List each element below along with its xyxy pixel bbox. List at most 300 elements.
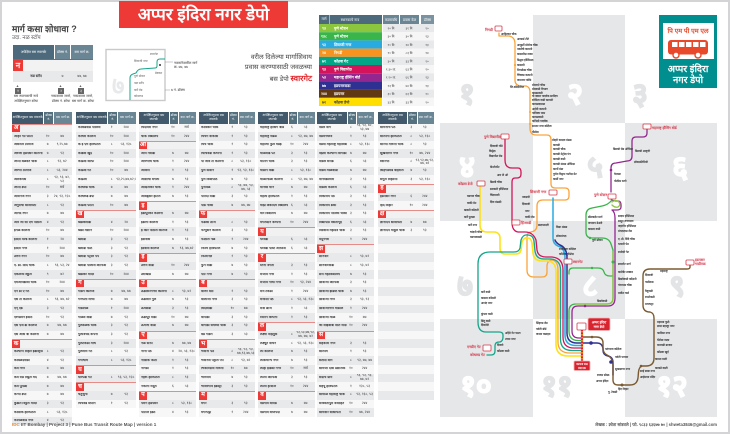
route colour key table: १.३० ता. — [386, 68, 396, 72]
index table column 2: १० — [110, 228, 114, 232]
index table column 4 — [199, 112, 255, 414]
index table column 1: ८ — [47, 203, 49, 207]
index table column 6: १० — [349, 366, 353, 370]
terminal stations — [477, 26, 694, 351]
index table column 6: ९३ — [363, 134, 366, 138]
route colour key table: ३१ मि — [406, 26, 413, 30]
index table column 3: ७ — [172, 237, 174, 241]
index table column 6: ७७ — [363, 151, 366, 155]
index table column 6: अपेक्षितनुसार बस स्थानके — [321, 113, 342, 121]
index table column 6: ९३ — [363, 289, 366, 293]
how-to example table: नकाशावर जाणे, बस मार्ग क्र. शोधा — [72, 94, 94, 103]
index table column 1: ७७ — [60, 228, 64, 232]
map grid: 12 numbered sectors — [440, 15, 717, 417]
index table column 3: ६ — [172, 384, 174, 388]
example mini map: कोथरूड — [134, 94, 143, 98]
station labels: येरवडा — [613, 172, 621, 176]
index table column 4: ८ — [231, 358, 233, 362]
index table column 3: २४४ — [184, 159, 189, 163]
index table column 4: ९३ — [244, 254, 248, 258]
index table column 2: ३ — [111, 263, 113, 267]
index table column 2: १० — [110, 168, 114, 172]
index table column 1: ८ — [47, 168, 49, 172]
index table column 4: ९३ — [244, 142, 248, 146]
index table column 1: १० — [46, 228, 50, 232]
badge: PMPML depot — [659, 15, 717, 88]
index table column 5: डॉक्स नं. — [290, 113, 296, 121]
index table column 4: डॉक्स नं. — [230, 113, 237, 121]
Swargate note: प्रवास करण्यासाठी जवळच्या — [245, 64, 312, 71]
station labels: कर्मवीर ठक्कर — [617, 270, 634, 274]
route colour key table: १० मि — [388, 26, 395, 30]
index table column 2: १० — [110, 151, 114, 155]
index table column 4: ५३, १३८ — [240, 159, 251, 163]
index table column 5: १० — [290, 220, 294, 224]
index table column 2: बस मार्ग क्र. — [120, 115, 134, 119]
station labels: काकडे वस्ती — [654, 366, 668, 370]
index table column 5: ९३, ५३, १३८ — [297, 297, 314, 301]
index table column 4: ९३ — [244, 246, 248, 250]
index table column 2: १ — [111, 401, 113, 405]
index table column 6: ८ — [350, 254, 352, 258]
index table column 7: ७७ — [423, 220, 427, 224]
station labels: सिंहगड रोड — [535, 321, 548, 325]
index table column 5: ६ — [291, 203, 293, 207]
route colour key table: स्थानकाचे नाव — [341, 17, 360, 22]
index table column 3: १० — [171, 125, 175, 129]
index table column 2: ३ — [111, 332, 113, 336]
station labels: मगरपट्टा — [644, 302, 654, 306]
index table column 5: ५३ — [304, 125, 307, 129]
station labels: सान्तर नगर कॉलेज — [531, 124, 552, 128]
station labels: निगडोळा चौक — [516, 68, 533, 72]
index table column 2: ९३ — [124, 246, 128, 250]
index table column 5: ६ — [291, 246, 293, 250]
station labels: चिंचवड कम्पनी — [516, 73, 533, 77]
index table column 1: ७ — [47, 142, 49, 146]
index table column 6: ८ — [350, 358, 352, 362]
index table column 5: ७७ — [304, 401, 307, 405]
station labels: कासारी — [516, 63, 525, 67]
route colour key table: ३० मि — [388, 59, 395, 63]
index table column 2: ९३ — [124, 349, 128, 353]
route colour key table: ६३ मि — [406, 92, 413, 96]
index table column 4: ७ — [231, 177, 233, 181]
index table column 6: ८ — [350, 142, 352, 146]
index table column 6: १० — [349, 410, 353, 414]
index table column 3: १० — [171, 134, 175, 138]
station labels: चांदनी चौक — [469, 230, 483, 234]
index table column 2: १० — [110, 203, 114, 207]
index table column 4: ७ — [231, 203, 233, 207]
station labels: कासारीस नाका — [516, 52, 533, 56]
index table column 4: ७ — [231, 272, 233, 276]
index table column 5: य — [260, 229, 264, 235]
station labels: पर्वती पायथा — [614, 355, 628, 359]
index table column 6: ९३ — [363, 228, 366, 232]
index table column 4: ९३ — [244, 228, 248, 232]
index table column 6: १ — [350, 134, 352, 138]
index table column 5: २४४ — [303, 289, 308, 293]
map grid: 12 numbered sectors: ८ — [582, 270, 598, 303]
index table column 5: ३ — [291, 159, 293, 163]
station labels: विद्यापीठ रोड — [488, 154, 503, 158]
route colour key table: १४ — [425, 51, 429, 55]
index table column 4: ९३, ९३, १३८ — [237, 168, 254, 172]
index table column 2: ८ — [111, 358, 113, 362]
index table column 1: ७७, ७७ — [57, 323, 67, 327]
route colour key table: १.१० ता. — [386, 76, 396, 80]
index table column 4: ९३ — [244, 134, 248, 138]
index table column 1: ९३ — [60, 315, 64, 319]
index table column 1: ३ — [47, 306, 49, 310]
index table column 3: ४ — [172, 349, 174, 353]
station labels: कोंढवा खुर्द — [656, 350, 670, 354]
index table column 4: ७७, ७७ — [241, 203, 250, 207]
route rows: १३८ — [321, 35, 327, 39]
index table column 6: ३ — [350, 177, 352, 181]
index table column 1: ७७ — [60, 134, 64, 138]
index table column 2: ३ — [111, 237, 113, 241]
index table column 3: ९३, ७२ — [182, 289, 191, 293]
index table column 2: ८ — [111, 142, 113, 146]
index table column 6: १० — [349, 323, 353, 327]
route: Kondhwa gate teal — [478, 235, 582, 355]
index table column 6: २४४ — [362, 306, 367, 310]
index table column 4: २४४ — [243, 410, 248, 414]
how-to example table: ▲ — [16, 84, 19, 88]
how-to example table: ७ — [62, 74, 63, 78]
index table column 2: ७ — [111, 289, 113, 293]
index table column 2: ७७ — [124, 194, 128, 198]
route rows: ९३ — [322, 26, 326, 30]
route colour key table: १३ — [425, 43, 429, 47]
index table column 6: ३ — [350, 194, 352, 198]
station labels: नगर — [524, 209, 530, 213]
station labels: महात्मा फुले — [656, 320, 670, 324]
index table column 3: १ — [172, 220, 174, 224]
index table column 1: ७७ — [60, 332, 64, 336]
station labels: जमनगर कोके — [516, 78, 532, 82]
station labels: शिवाजी — [644, 273, 653, 277]
index table column 6: ३ — [350, 297, 352, 301]
index table column 6: ७७ — [363, 168, 366, 172]
index table column 3: ८ — [172, 375, 174, 379]
index table column 2: ७७, ७७ — [121, 289, 131, 293]
index table column 2: ३ — [111, 323, 113, 327]
station labels: फातिमा नगर — [656, 331, 671, 335]
index table column 4: १ — [231, 125, 233, 129]
index table column 2: १० — [110, 272, 114, 276]
how-to example table: नकाशावर जाणे, डॉक्स नं. शोधा — [51, 94, 71, 103]
index table column 6: ३ — [350, 228, 352, 232]
index table column 6: बस मार्ग क्र. — [359, 115, 373, 119]
index table column 1: अपेक्षितनुसार बस स्थानके — [12, 115, 43, 119]
index table column 3: ४ — [172, 410, 174, 414]
index table column 3: ए — [141, 332, 145, 338]
route rows: पुणे स्टेशन — [333, 34, 349, 40]
route colour key table: १० — [425, 68, 429, 72]
route colour key table: १० — [425, 100, 429, 104]
station labels: कावडी वाडी — [552, 157, 566, 161]
station labels: कामत माती — [654, 357, 667, 361]
index table column 3: ७ — [172, 194, 174, 198]
station labels: वानवडी बाजार — [656, 343, 673, 347]
terminal labels: निगडी — [484, 27, 494, 32]
example mini map: कर्वे रोड — [134, 88, 143, 92]
index table column 7: बस मार्ग क्र. — [419, 115, 433, 119]
index table column 6: ९३ — [363, 203, 366, 207]
index table column 2: ७ — [111, 392, 113, 396]
index table column 3: ७ — [172, 272, 174, 276]
route: Pune station green — [569, 200, 613, 340]
route colour key table: १० मि — [388, 51, 395, 55]
map grid: 12 numbered sectors: १२ — [656, 370, 688, 403]
index table column 2: ग — [78, 280, 82, 286]
route rows: ७२ — [322, 100, 326, 104]
index table column 4: ९३ — [244, 384, 248, 388]
index table column 6: १ — [350, 384, 352, 388]
index table column 3: ७७ — [185, 151, 188, 155]
index table column 5: ९३ — [304, 349, 307, 353]
index table column 1: ८ — [47, 159, 49, 163]
index table column 6: ९३ — [363, 177, 366, 181]
index table column 3: १ — [172, 228, 174, 232]
index table column 1: सर्व — [60, 185, 64, 189]
heading: how to find a route: मार्ग कसा शोधावा ? — [12, 24, 77, 34]
index table column 5: ६ — [291, 237, 293, 241]
index table column 4: ८ — [231, 349, 233, 353]
station labels: आकुर्डी मोटोक चौक — [516, 43, 539, 47]
route: Pune University pink — [505, 139, 582, 348]
index table column 1: ९,२५,७७ — [57, 142, 68, 146]
index table column 4: ब — [201, 280, 205, 286]
route colour key table: १३ मि — [388, 84, 395, 88]
station labels: बालभारती — [537, 223, 549, 227]
text: ४ — [47, 418, 49, 422]
station labels: कॉलेज हॉस्टेल — [558, 252, 575, 256]
station labels: वडगावबाडी — [469, 235, 482, 239]
index table column 4: ७ — [231, 375, 233, 379]
footer credit: IDC IIT Bombay | Project 3 | Pune Bus Transit Route Map | version 1 — [12, 422, 156, 427]
route rows: महाराष्ट्र हौसिंग बोर्ड — [333, 75, 361, 80]
index table column 2: १ — [111, 306, 113, 310]
index table column 2: ८ — [111, 177, 113, 181]
index table column 5: १ — [291, 315, 293, 319]
index table column 2: च — [78, 384, 82, 390]
index table column 1: अ — [14, 125, 18, 131]
index table column 2: ९३ — [124, 254, 128, 258]
route rows: निगडी — [333, 50, 343, 55]
index table column 7: ७ — [410, 168, 412, 172]
index table column 7: ह — [380, 185, 384, 191]
index table column 5: ९३, ७७, ७७ — [298, 177, 313, 181]
index table column 7: १० — [409, 203, 413, 207]
index table column 3: ७७, ७७ — [182, 341, 191, 345]
index table column 3: ७७ — [185, 272, 188, 276]
route colour key table: कालावधि — [385, 17, 398, 22]
example mini map: ७ — [112, 73, 124, 100]
index table column 1: ७७ — [60, 366, 64, 370]
station labels: लोकप्रतिनिधी — [633, 160, 648, 164]
index table column 3: उ — [141, 280, 145, 286]
route rows: पुणे विद्यापीठ — [333, 66, 353, 72]
index table column 3: ७७ — [185, 315, 188, 319]
index table column 1: १ — [47, 246, 49, 250]
index table column 3: २४, ५३, १३८ — [178, 349, 195, 353]
text: ९३ — [60, 418, 64, 422]
index table column 4: म — [201, 392, 205, 398]
index table column 7: ७ — [410, 220, 412, 224]
how-to example table — [13, 45, 94, 103]
index table column 1: १० — [46, 315, 50, 319]
station labels: कर्वे पुतळा — [463, 215, 475, 219]
terminal labels: कोथरुड गेट — [469, 352, 485, 357]
index table column 3: १० — [171, 315, 175, 319]
terminal labels: कोंढवा डेपो — [457, 181, 474, 186]
index table column 2: ७७ — [124, 185, 128, 189]
route: Hadapsar wada navy — [555, 240, 613, 375]
index table column 6: १ — [350, 306, 352, 310]
index table column 5: ९३, ७७, ७७ — [298, 134, 313, 138]
index table column 5: ८ — [291, 297, 293, 301]
index table column 4: ३ — [231, 194, 233, 198]
how-to example table: ३ — [80, 88, 82, 92]
station labels: गु. टेकडी — [607, 390, 617, 394]
index table column 4: ९३ — [244, 315, 248, 319]
station labels: रामोशी गेट — [617, 250, 630, 254]
index table column 1: १० — [46, 185, 50, 189]
route colour key table: ४४ मि — [406, 84, 413, 88]
index table column 6: ९३, १३८, ५३ — [356, 392, 373, 396]
index table column 6: १ — [350, 237, 352, 241]
index table column 5: ९३ — [304, 159, 307, 163]
index table column 3: प — [141, 392, 145, 398]
station labels: आनंद नगर — [480, 301, 493, 305]
station labels: वैदूवाडी — [644, 289, 653, 293]
index table column 3: ९३ — [185, 228, 188, 232]
station labels: लाल बहादूर नगर — [656, 324, 675, 328]
index table column 1: २४४ — [59, 246, 65, 250]
title banner — [119, 1, 288, 28]
index table column 1: ३ — [47, 194, 49, 198]
route colour key table: १० मि — [388, 43, 395, 47]
index table column 3: ८ — [172, 289, 174, 293]
index table column 7: ५३, १३८ — [419, 177, 430, 181]
station labels: ए. डी. शिंदे चौक — [617, 237, 636, 241]
index table column 6: ६ — [350, 220, 352, 224]
route lines — [478, 33, 690, 385]
station labels: उत्तम नगर — [504, 337, 516, 341]
index table column 6: ९३ — [363, 341, 366, 345]
index table column 6: ५३ — [363, 185, 366, 189]
route rows — [319, 24, 382, 106]
index table column 3: ९३ — [185, 366, 188, 370]
station labels: जनता वसाहत — [535, 332, 551, 336]
badge: PMPML depot: नगर डेपो — [672, 74, 704, 86]
index table column 2: २४४ — [123, 272, 129, 276]
terminal labels: पुणे विद्यापीठ — [483, 134, 502, 140]
index table column 1: ९३ — [60, 220, 64, 224]
index table column 1: ८ — [47, 349, 49, 353]
index table column 4: १ — [231, 410, 233, 414]
route colour key table: ३० मि — [406, 35, 413, 39]
index table column 6: ३ — [350, 211, 352, 215]
index table column 3 — [139, 112, 196, 414]
index table column 1: २४४ — [59, 280, 65, 284]
route colour key table: डॉक्स — [423, 17, 432, 22]
station labels: पतंगराव कॉलेज — [604, 347, 622, 351]
index table column 3: ७ — [172, 297, 174, 301]
station labels: अहिरे गेट फाटा — [504, 331, 521, 335]
route rows: २४४ — [321, 92, 327, 96]
index table column 6: ७ — [350, 272, 352, 276]
index table column 5: ६ — [291, 125, 293, 129]
station labels — [463, 32, 675, 394]
route rows: ९३ — [322, 43, 326, 47]
index table column 5: १ — [291, 194, 293, 198]
route rows: हडपसर — [333, 92, 345, 96]
index table column 3: बस मार्ग क्र. — [181, 115, 195, 119]
station labels: वाकी रोड — [524, 215, 535, 219]
station labels: गंगाधाम चौक — [617, 283, 633, 287]
route rows: ७७ — [322, 84, 326, 88]
Swargate note: वरील दिलेल्या मार्गाशिवाय — [251, 54, 312, 61]
route rows: पुणे स्टेशन — [333, 26, 349, 32]
index table column 3: ७ — [172, 211, 174, 215]
index table column 6: ८ — [350, 125, 352, 129]
index table column 1: ७ — [47, 323, 49, 327]
station labels: पर्वती बोर्ड — [535, 327, 547, 331]
index table column 6: १३८, ५३ — [359, 384, 370, 388]
index table column 6 — [317, 112, 374, 417]
index table column 3: ५३ — [185, 384, 188, 388]
route colour key table: १० — [425, 59, 429, 63]
index table column 7 — [378, 112, 434, 400]
index table column 4: १ — [231, 142, 233, 146]
station labels: अप्पर इंदिरा — [595, 379, 609, 383]
index table column 5: ५३, १३८ — [300, 168, 311, 172]
route colour key table: ३३ मि — [406, 100, 413, 104]
station labels: सदाम हॉस्पिटल — [617, 214, 635, 218]
station labels: राजस सोसा. — [596, 373, 610, 377]
map grid: 12 numbered sectors: ११ — [541, 370, 573, 403]
index table column 3: २४४ — [184, 134, 189, 138]
station labels: कोंढवा वाडी — [496, 349, 510, 353]
index table column 4: भ — [201, 341, 205, 347]
index table column 5: ५३ — [304, 203, 307, 207]
index table column 1: ४ — [47, 358, 49, 362]
index table column 4: ९३ — [244, 263, 248, 267]
station labels: सुखसागर नगर — [614, 367, 631, 371]
index table column 5: ८ — [291, 332, 293, 336]
how-to example table: अपेक्षित बस स्थानके — [21, 50, 46, 54]
route colour key table: ३३ मि — [406, 59, 413, 63]
index table column 3: ९३ — [185, 358, 188, 362]
index table column 5: ७ — [291, 401, 293, 405]
index table column 5: १० — [290, 280, 294, 284]
index table column 5 — [258, 112, 315, 414]
index table column 1: क — [14, 341, 18, 347]
index table column 5: ७ — [291, 349, 293, 353]
index table column 6: ९३ — [363, 211, 366, 215]
station labels: यी क्वारा पार्श्वक सर्वोदय — [531, 94, 558, 98]
index table column 2: ४ — [111, 220, 113, 224]
map grid: 12 numbered sectors: २ — [567, 78, 583, 111]
heading: how to find a route — [12, 24, 77, 41]
station labels: भैरोबा नाला — [657, 338, 670, 342]
station labels: बोंडवालेर मार्ग — [587, 215, 603, 219]
